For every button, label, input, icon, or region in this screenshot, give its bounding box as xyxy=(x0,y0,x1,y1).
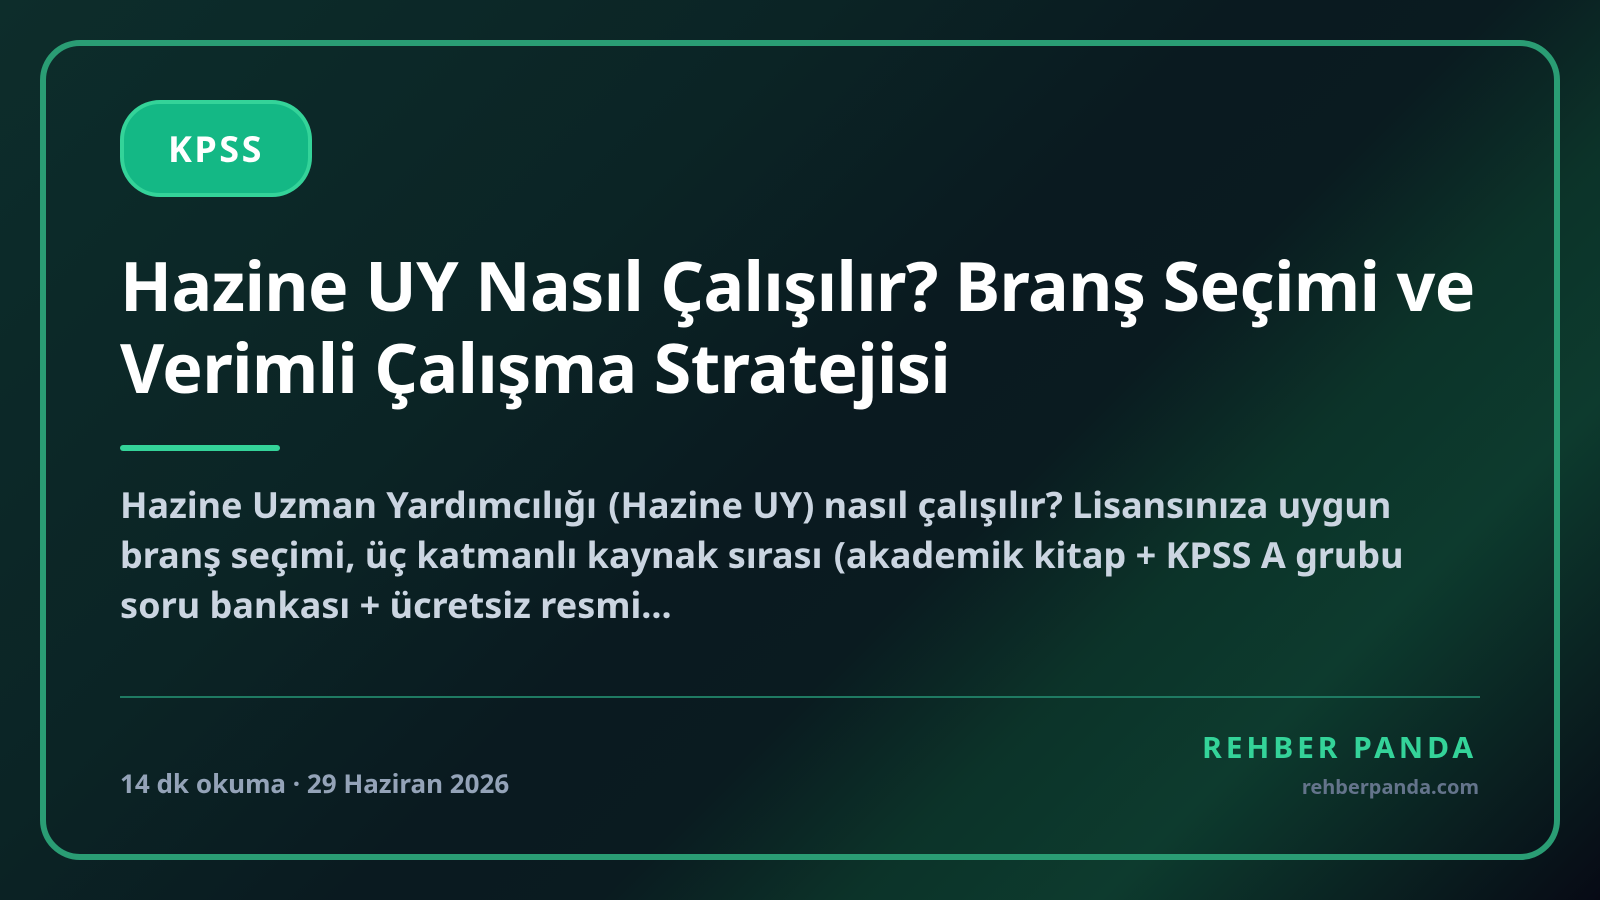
divider xyxy=(120,696,1480,698)
badge: KPSS: KPSS xyxy=(168,124,264,173)
brand name: REHBER PANDA xyxy=(1202,726,1477,767)
description text: Hazine Uzman Yardımcılığı (Hazine UY) nasıl çalışılır? Lisansınıza uygun xyxy=(120,480,1391,529)
badge: KPSS xyxy=(120,100,312,197)
meta: reading time and date: 14 dk okuma · 29 Haziran 2026 xyxy=(120,765,509,801)
description text xyxy=(120,480,1403,629)
title: Hazine UY Nasıl Çalışılır? Branş Seçimi ve xyxy=(120,238,1475,331)
brand url: rehberpanda.com xyxy=(1302,773,1479,800)
title: Verimli Çalışma Stratejisi xyxy=(120,320,950,413)
accent rule xyxy=(120,445,280,451)
description text: soru bankası + ücretsiz resmi... xyxy=(120,580,672,629)
description text: branş seçimi, üç katmanlı kaynak sırası (akademik kitap + KPSS A grubu xyxy=(120,530,1403,579)
title xyxy=(120,238,1475,413)
